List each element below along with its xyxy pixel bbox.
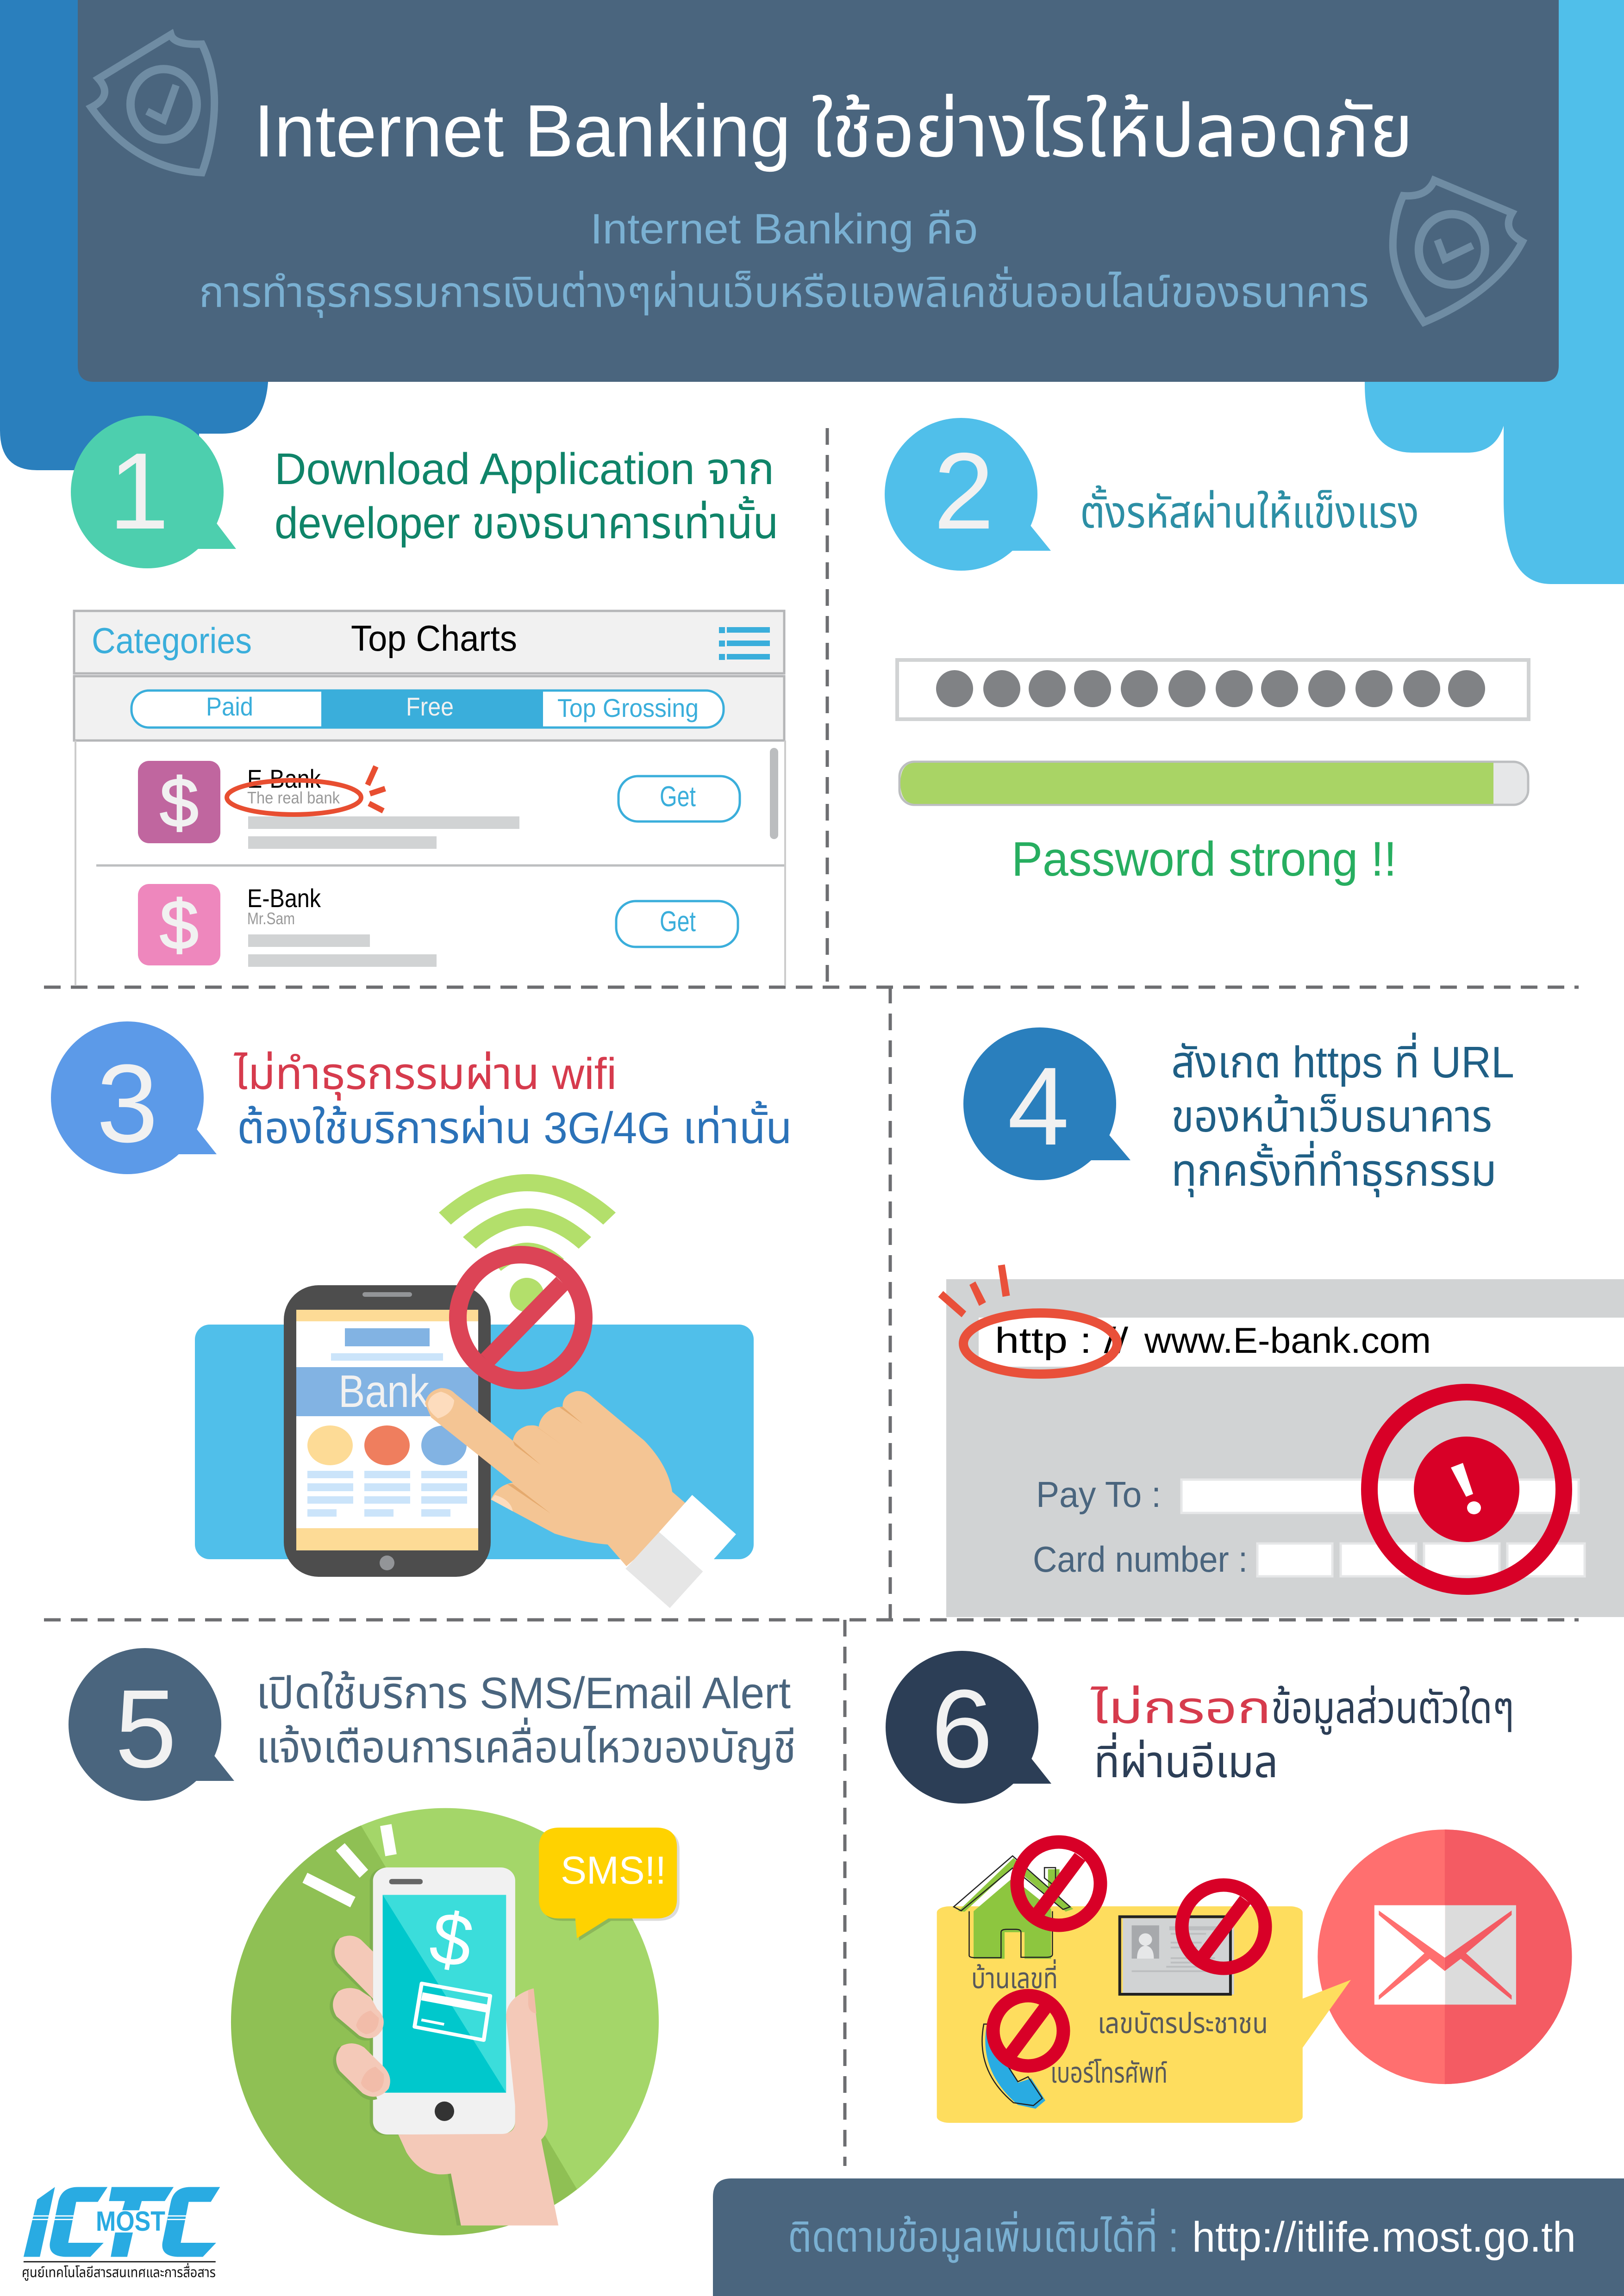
- step 3 badge: [51, 1021, 217, 1174]
- footer bar: ติดตามข้อมูลเพิ่มเติมได้ที่ :: [788, 2209, 1179, 2263]
- highlight: red ring on url: [938, 1264, 1117, 1374]
- url text: http : //: [995, 1320, 1128, 1361]
- icon: right shield: [1393, 180, 1522, 322]
- step 6 text: ข้อมูลส่วนตัวใดๆ: [1271, 1683, 1514, 1735]
- tab pills: Paid: [206, 692, 253, 721]
- form fields: [1181, 1480, 1585, 1576]
- step 6 text: [1090, 1683, 1514, 1787]
- app row 1: Get: [660, 781, 696, 813]
- step 1 badge: [71, 416, 236, 568]
- app row 2: Mr.Sam: [247, 909, 295, 928]
- step 6 text: ที่ผ่านอีเมล: [1094, 1732, 1278, 1787]
- step 4 text: [1171, 1033, 1514, 1197]
- illustration: phone with sms: [231, 1808, 680, 2235]
- dollar symbol: $: [424, 1895, 479, 1984]
- speech box: [937, 1906, 1351, 2123]
- phone: Bank: [338, 1366, 430, 1417]
- footer bar: http://itlife.most.go.th: [1192, 2214, 1576, 2261]
- step 5 badge: 5: [115, 1667, 177, 1791]
- hand: [425, 1388, 736, 1608]
- step 1 text: [275, 444, 779, 548]
- tab pills: [131, 691, 724, 728]
- password field: [897, 660, 1529, 719]
- step 6 badge: 6: [931, 1667, 993, 1791]
- app row 2: E-Bank: [247, 884, 321, 913]
- background tab: light blue right: [1365, 0, 1624, 584]
- sms bubble: [539, 1828, 680, 1941]
- subtitle line 1: Internet Banking คือ: [590, 205, 979, 253]
- app row 1: The real bank: [247, 788, 340, 807]
- app row 2: [138, 884, 738, 967]
- browser mockup: www.E-bank.com: [1144, 1320, 1431, 1361]
- password strength bar: [899, 762, 1528, 805]
- title: Internet Banking ใช้อย่างไรให้ปลอดภัย: [254, 89, 1413, 172]
- icon: warning: [1369, 1392, 1564, 1587]
- browser mockup: [938, 1264, 1624, 1617]
- icon: house: [954, 1856, 1073, 1959]
- data labels: [971, 1959, 1268, 2089]
- step 2 text: ตั้งรหัสผ่านให้แข็งแรง: [1080, 485, 1419, 537]
- step 5 text: [256, 1668, 796, 1772]
- step 2 badge: 2: [934, 430, 994, 552]
- step 6 badge: [886, 1651, 1051, 1804]
- icon: prohibition sign: [458, 1255, 584, 1381]
- browser mockup: Card number :: [1033, 1539, 1248, 1580]
- step 1 badge: 1: [109, 430, 169, 552]
- step 4 badge: 4: [1007, 1044, 1069, 1168]
- step 3 text: ไม่ทำธุรกรรมผ่าน wifi: [233, 1049, 617, 1101]
- logo: [22, 2187, 220, 2281]
- app row 1: [138, 748, 778, 849]
- data labels: บ้านเลขที่: [971, 1959, 1058, 1995]
- icon: left shield: [91, 35, 214, 173]
- icon: menu list: [719, 627, 770, 660]
- app row 1: $: [160, 764, 199, 841]
- step 4 text: ทุกครั้งที่ทำธุรกรรม: [1171, 1141, 1497, 1197]
- step 4 badge: [963, 1027, 1131, 1180]
- step 4 text: ของหน้าเว็บธนาคาร: [1171, 1092, 1492, 1141]
- data labels: เลขบัตรประชาชน: [1098, 2008, 1268, 2040]
- icon: id card: [1120, 1917, 1234, 1994]
- password strong label: Password strong !!: [1012, 832, 1397, 886]
- step 5 text: เปิดใช้บริการ SMS/Email Alert: [256, 1668, 791, 1718]
- icon: email circle: [1318, 1829, 1572, 2084]
- logo: MOST: [96, 2206, 165, 2237]
- tab pills: Free: [406, 692, 454, 721]
- app row 2: $: [160, 886, 199, 964]
- prohibition signs: [993, 1842, 1265, 2066]
- step 5 text: แจ้งเตือนการเคลื่อนไหวของบัญชี: [256, 1717, 796, 1772]
- step 3 badge: 3: [96, 1041, 158, 1165]
- tab pills: Top Grossing: [557, 693, 699, 722]
- icon: wifi: [439, 1174, 616, 1312]
- illustration: phone with sms: SMS!!: [561, 1848, 666, 1892]
- step 1 text: Download Application จาก: [275, 444, 775, 494]
- browser mockup: Pay To :: [1036, 1474, 1161, 1515]
- categories label: Categories: [92, 620, 252, 661]
- highlight: red ring: [227, 766, 385, 815]
- step 2 badge: [885, 418, 1051, 571]
- subtitle line 2: การทำธุรกรรมการเงินต่างๆผ่านเว็บหรือแอพลิเคชั่นออนไลน์ของธนาคาร: [199, 266, 1369, 318]
- logo: ศูนย์เทคโนโลยีสารสนเทศและการสื่อสาร: [22, 2263, 216, 2281]
- divider lines: [44, 428, 1579, 2166]
- header panel: [78, 0, 1559, 382]
- icon: telephone: [982, 2024, 1045, 2109]
- illustration: personal data email: [937, 1829, 1572, 2123]
- app row 2: Get: [660, 906, 696, 938]
- step 4 text: สังเกต https ที่ URL: [1171, 1033, 1514, 1087]
- top charts label: Top Charts: [351, 618, 517, 659]
- app store mockup: [74, 611, 785, 986]
- footer bar: [713, 2178, 1624, 2296]
- step 5 badge: [69, 1648, 234, 1801]
- step 3 text: ต้องใช้บริการผ่าน 3G/4G เท่านั้น: [237, 1101, 792, 1153]
- background tab: dark blue left: [0, 0, 269, 470]
- phone: [284, 1285, 491, 1577]
- illustration: phone no wifi: [195, 1174, 754, 1608]
- step 1 text: developer ของธนาคารเท่านั้น: [275, 496, 779, 548]
- step 3 text: [233, 1049, 792, 1153]
- app row 1: E-Bank: [247, 764, 321, 793]
- data labels: เบอร์โทรศัพท์: [1050, 2057, 1168, 2089]
- step 6 text: ไม่กรอก: [1090, 1683, 1271, 1733]
